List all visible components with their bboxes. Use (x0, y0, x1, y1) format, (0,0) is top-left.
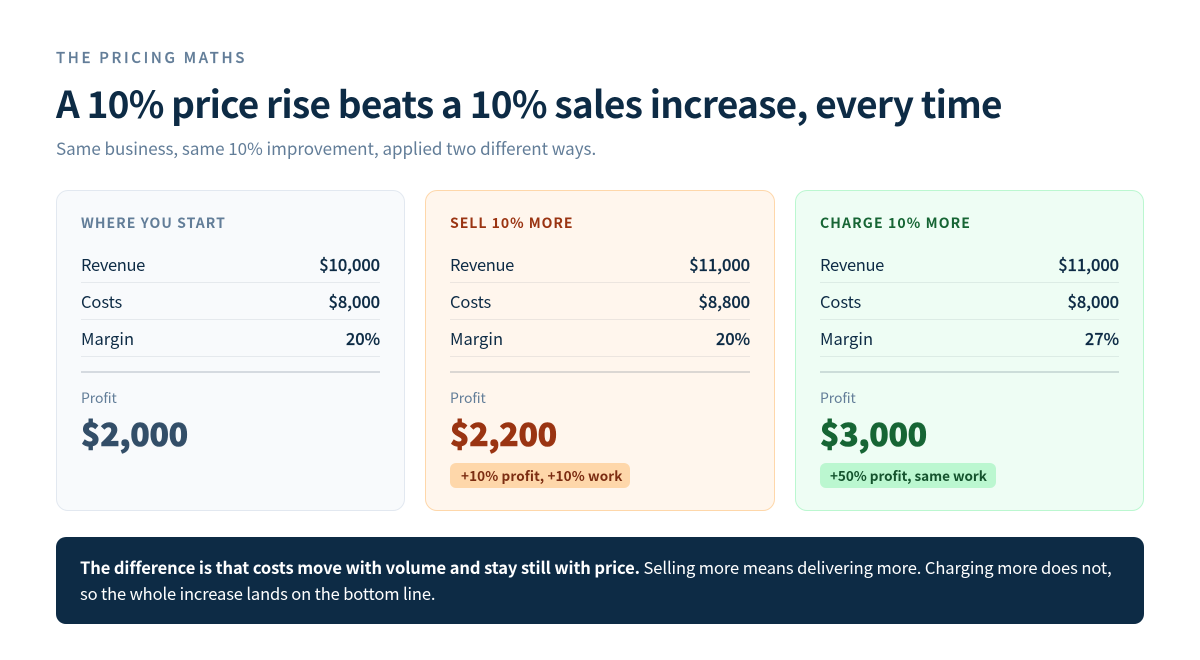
panel: charge 10% more (795, 190, 1144, 511)
row: revenue: Revenue (820, 252, 884, 276)
row: revenue (820, 246, 1119, 283)
row: costs: Costs (450, 289, 491, 313)
row: margin: Margin (81, 326, 134, 350)
row: margin: 20% (346, 326, 380, 350)
eyebrow: THE PRICING MATHS (56, 47, 247, 68)
panel heading: WHERE YOU START (81, 213, 226, 233)
row: revenue: Revenue (81, 252, 145, 276)
takeaway banner (56, 537, 1144, 624)
row: margin: 27% (1085, 326, 1119, 350)
row: revenue: $10,000 (319, 252, 380, 276)
row: margin (450, 320, 750, 357)
row: revenue (450, 246, 750, 283)
panel heading: SELL 10% MORE (450, 213, 574, 233)
panel heading: CHARGE 10% MORE (820, 213, 971, 233)
profit value: $2,200 (450, 410, 557, 456)
row: margin: Margin (450, 326, 503, 350)
row: revenue: Revenue (450, 252, 514, 276)
panel: sell 10% more (425, 190, 775, 511)
row: revenue (81, 246, 380, 283)
row: costs (820, 283, 1119, 320)
row: margin: Margin (820, 326, 873, 350)
title: A 10% price rise beats a 10% sales increase, every time (56, 75, 1002, 129)
badge: +10% profit, +10% work (461, 465, 623, 485)
row: revenue: $11,000 (1058, 252, 1119, 276)
row: costs: $8,000 (329, 289, 380, 313)
profit label: Profit (450, 388, 486, 408)
row: costs: Costs (81, 289, 122, 313)
badge: +50% profit, same work (830, 465, 987, 485)
row: costs (450, 283, 750, 320)
row: revenue: $11,000 (689, 252, 750, 276)
row: margin (820, 320, 1119, 357)
profit label: Profit (81, 388, 117, 408)
subtitle: Same business, same 10% improvement, applied two different ways. (56, 135, 596, 160)
takeaway line 1: The difference is that costs move with volume and stay still with price. Selling more means delivering more. Charging more does not, (80, 555, 1112, 579)
row: margin (81, 320, 380, 357)
row: costs: $8,800 (699, 289, 750, 313)
row: costs (81, 283, 380, 320)
takeaway line 2: so the whole increase lands on the bottom line. (80, 581, 435, 605)
row: costs: Costs (820, 289, 861, 313)
row: costs: $8,000 (1068, 289, 1119, 313)
row: margin: 20% (716, 326, 750, 350)
profit label: Profit (820, 388, 856, 408)
profit value: $2,000 (81, 410, 188, 456)
panel: where you start (56, 190, 405, 511)
profit value: $3,000 (820, 410, 927, 456)
